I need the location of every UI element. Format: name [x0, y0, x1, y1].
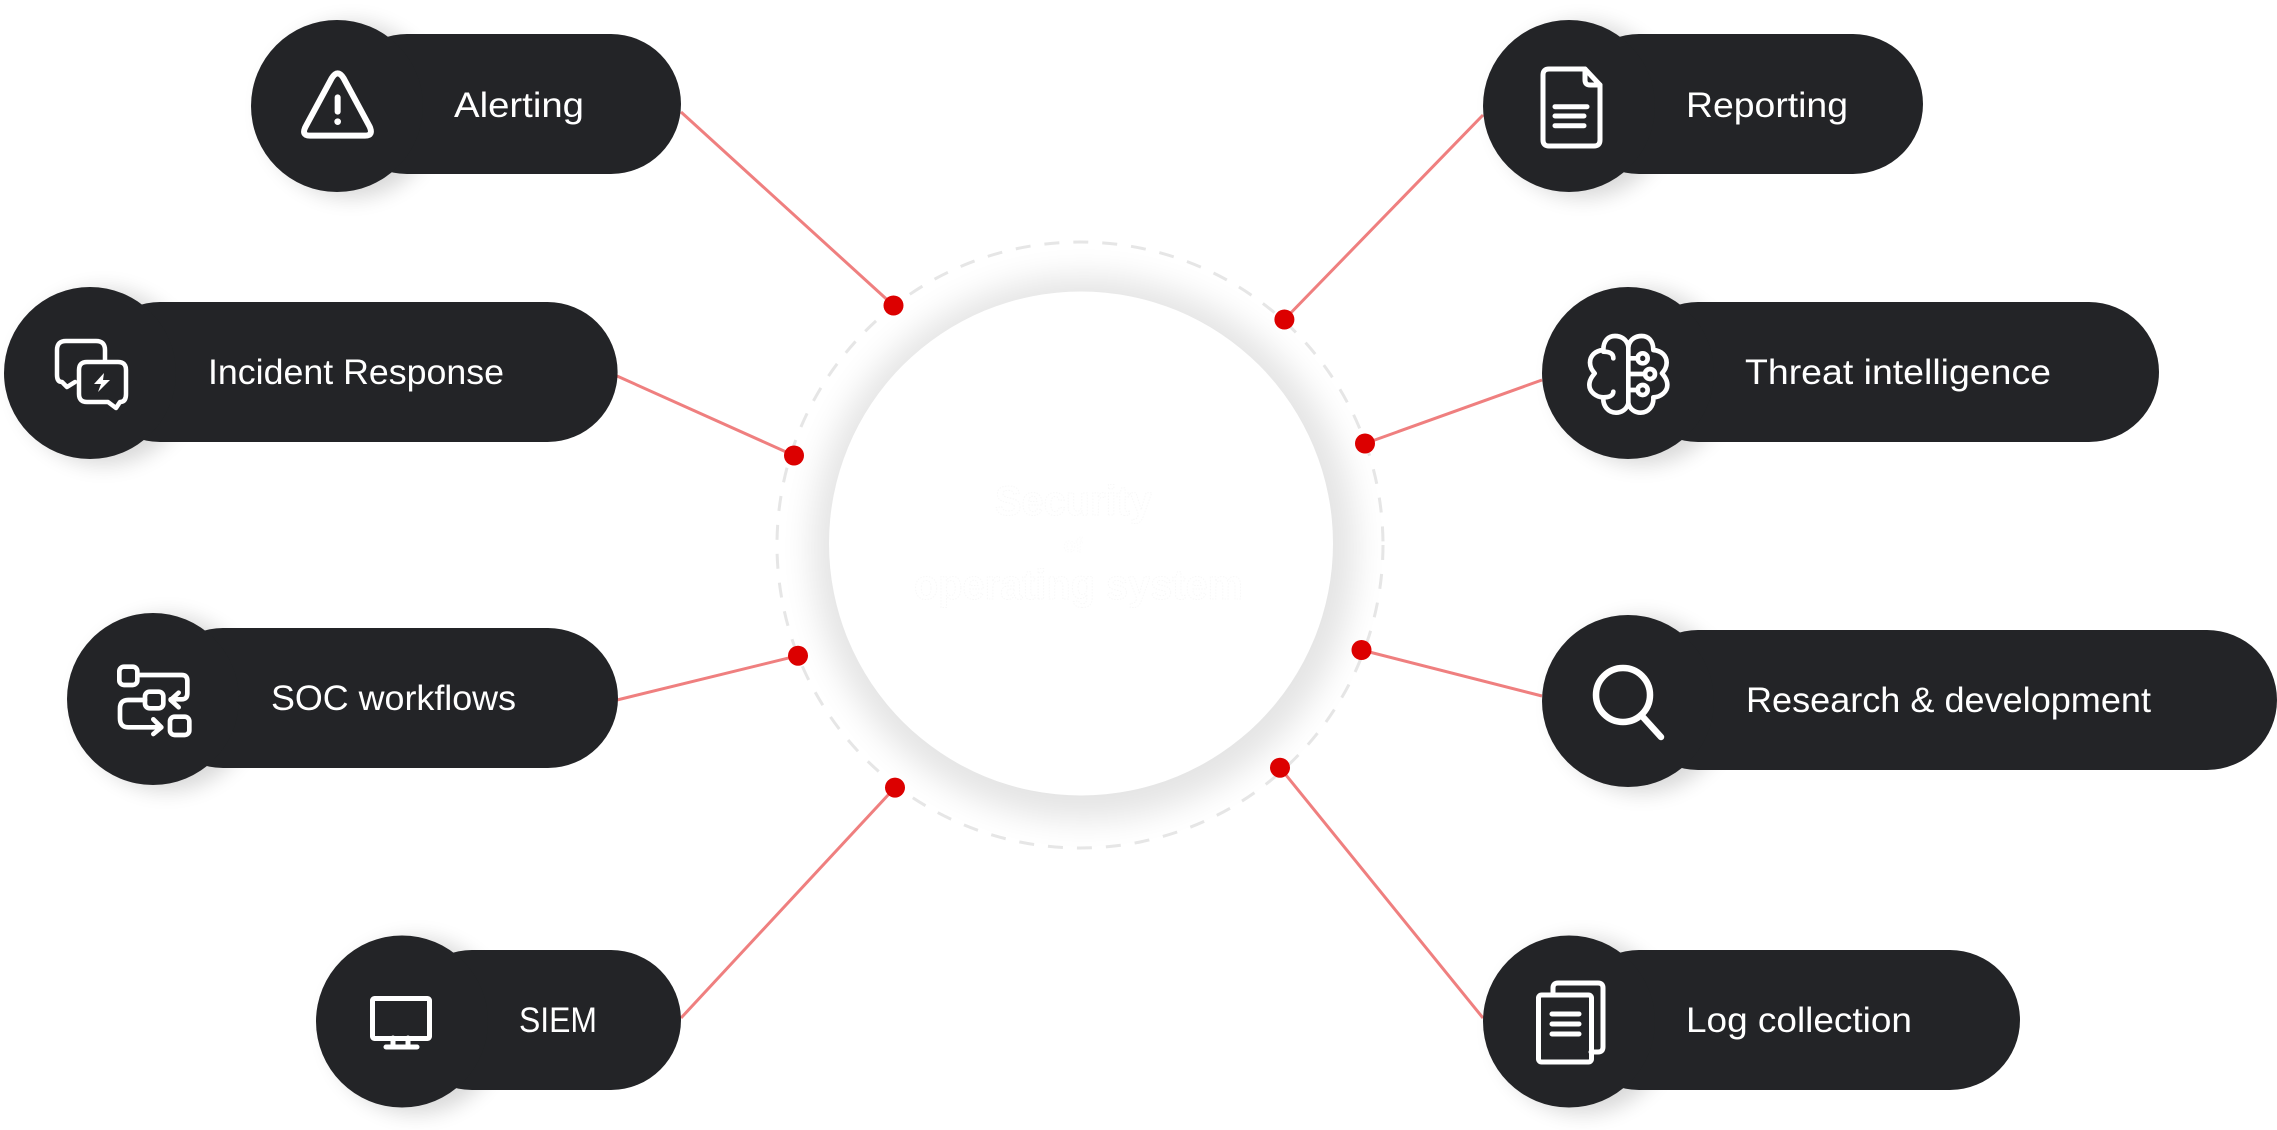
center title: [914, 477, 1243, 608]
icon: document: [1543, 69, 1600, 146]
node: SOC workflows: SOC workflows: [271, 679, 516, 718]
connector dots: [784, 296, 1375, 798]
node: Alerting: Alerting: [454, 86, 584, 125]
central circle with soft shadow: [812, 276, 1356, 820]
center title: operating system: [914, 561, 1243, 608]
icon: stacked documents: [1538, 983, 1603, 1062]
node: SOC workflows: [67, 613, 618, 791]
icon: brain circuit: [1589, 336, 1667, 413]
node: Research & development: [1542, 615, 2277, 793]
center title: Security: [995, 477, 1153, 524]
node: Log collection: Log collection: [1686, 1001, 1912, 1040]
icon: workflow: [119, 667, 189, 735]
icon: warning triangle: [304, 73, 371, 136]
node: Research & development: Research & development: [1746, 681, 2151, 720]
dashed outer ring: [777, 242, 1383, 848]
node: Threat intelligence: [1542, 287, 2159, 465]
node: Alerting: [251, 20, 681, 198]
node: Log collection: [1483, 936, 2020, 1114]
node: SIEM: SIEM: [519, 1001, 597, 1040]
center title: of: [1064, 535, 1083, 557]
icon: magnifier: [1596, 668, 1661, 737]
icon: monitor: [372, 998, 430, 1047]
icon: chat bubbles with bolt: [57, 341, 126, 408]
node: Threat intelligence: Threat intelligence: [1745, 353, 2051, 392]
connector lines: [617, 112, 1542, 1018]
node: Reporting: Reporting: [1686, 86, 1848, 125]
node: SIEM: [316, 936, 681, 1114]
node: Incident Response: Incident Response: [208, 353, 504, 392]
node: Reporting: [1483, 20, 1923, 198]
node: Incident Response: [4, 287, 618, 465]
